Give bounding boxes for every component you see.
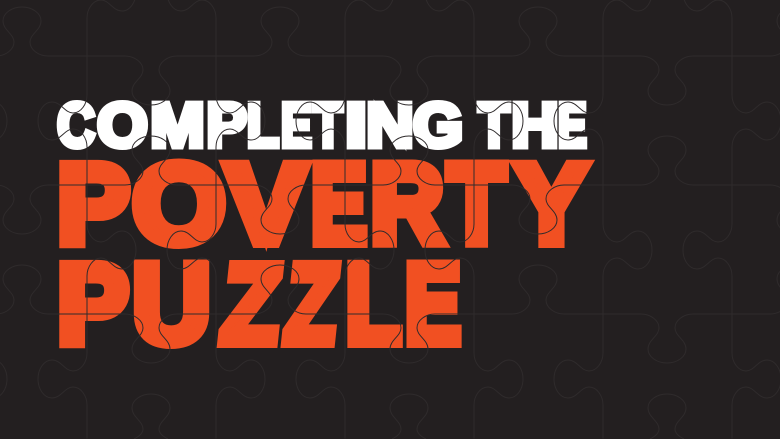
heading word: THE: E	[558, 92, 587, 160]
heading word: POVERTY: R	[371, 141, 444, 267]
heading word: POVERTY: O	[133, 141, 225, 267]
heading word: COMPLETING: E	[281, 90, 312, 160]
heading word: COMPLETING: G	[413, 91, 463, 160]
heading word: POVERTY: V	[226, 141, 306, 267]
heading word: PUZZLE: U	[133, 242, 210, 367]
heading word: PUZZLE: Z	[216, 241, 287, 366]
heading word: PUZZLE: E	[405, 242, 461, 366]
heading word: COMPLETING: I	[345, 90, 367, 160]
heading word: PUZZLE	[57, 241, 461, 367]
title	[57, 90, 588, 367]
heading word: THE: T	[478, 92, 510, 161]
heading word: PUZZLE: L	[346, 241, 401, 367]
heading word: POVERTY	[57, 141, 588, 267]
heading word: COMPLETING: T	[313, 91, 343, 160]
heading word: COMPLETING	[57, 90, 463, 161]
heading word: PUZZLE: Z	[280, 241, 344, 366]
heading word: COMPLETING: N	[366, 90, 414, 160]
heading word: THE: H	[511, 90, 559, 160]
heading word: COMPLETING: O	[97, 92, 148, 160]
heading word: POVERTY: E	[311, 142, 367, 266]
heading word: THE	[478, 90, 587, 161]
heading word: COMPLETING: C	[57, 91, 95, 161]
heading word: POVERTY: Y	[515, 142, 588, 267]
heading word: COMPLETING: P	[206, 91, 247, 160]
heading word: POVERTY: P	[57, 142, 130, 267]
heading word: COMPLETING: L	[247, 92, 279, 161]
heading word: COMPLETING: M	[150, 91, 205, 160]
heading word: POVERTY: T	[448, 141, 505, 266]
heading word: PUZZLE: P	[57, 242, 129, 367]
